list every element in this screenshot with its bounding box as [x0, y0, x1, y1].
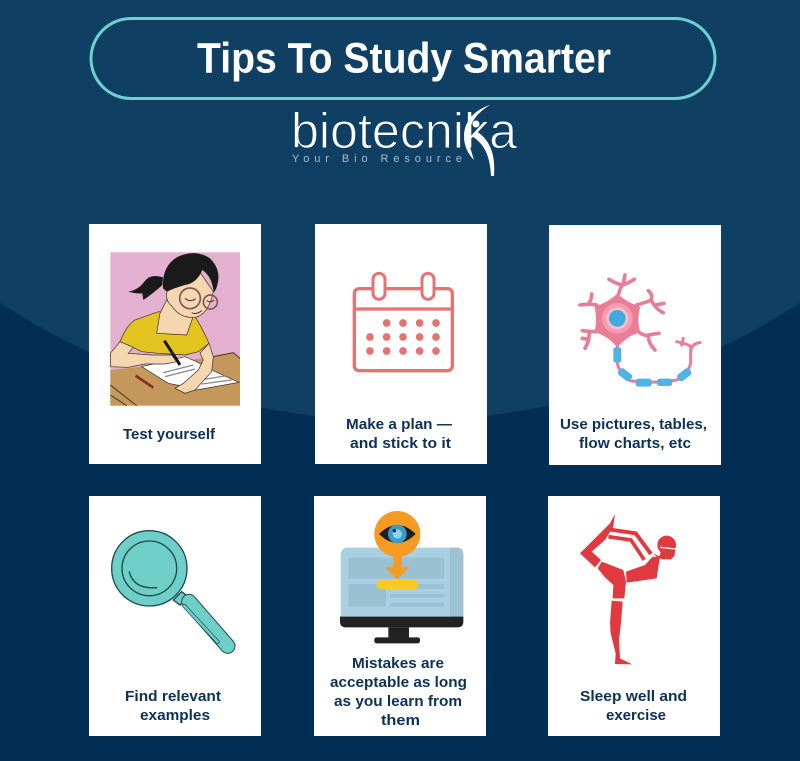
- title pill: [91, 18, 715, 98]
- caption: Mistakes are: [352, 656, 444, 672]
- panel: make a plan: [315, 224, 487, 464]
- logo: biotecnika: Your Bio Resource: [292, 153, 462, 165]
- caption: Sleep well and: [580, 689, 687, 705]
- title pill: Tips To Study Smarter: [197, 34, 611, 82]
- caption: [346, 417, 453, 452]
- panel: find relevant examples: [89, 496, 261, 736]
- caption: them: [381, 713, 420, 729]
- caption: [330, 656, 467, 729]
- caption: Test yourself: [123, 427, 215, 443]
- caption: and stick to it: [350, 436, 451, 452]
- caption: [125, 689, 221, 724]
- illustration: student writing: [110, 252, 240, 406]
- caption: as you learn from: [334, 694, 462, 710]
- caption: [580, 689, 687, 724]
- icon: yoga figure: [580, 514, 676, 664]
- panel: test yourself: [89, 224, 261, 464]
- icon: monitor with eye: [340, 511, 463, 643]
- panel: mistakes: [314, 496, 486, 736]
- caption: Find relevant: [125, 689, 221, 705]
- panel: sleep and exercise: [548, 496, 720, 736]
- caption: exercise: [606, 708, 666, 724]
- icon: magnifying glass: [112, 531, 228, 646]
- caption: acceptable as long: [330, 675, 467, 691]
- logo: biotecnika: biotecnika: [291, 103, 517, 159]
- caption: [560, 417, 707, 452]
- icon: calendar: [354, 273, 452, 371]
- caption: examples: [140, 708, 210, 724]
- caption: Use pictures, tables,: [560, 417, 707, 433]
- icon: neuron: [580, 275, 700, 387]
- caption: Make a plan —: [346, 417, 453, 433]
- panel: use pictures: [549, 225, 721, 465]
- caption: flow charts, etc: [579, 436, 691, 452]
